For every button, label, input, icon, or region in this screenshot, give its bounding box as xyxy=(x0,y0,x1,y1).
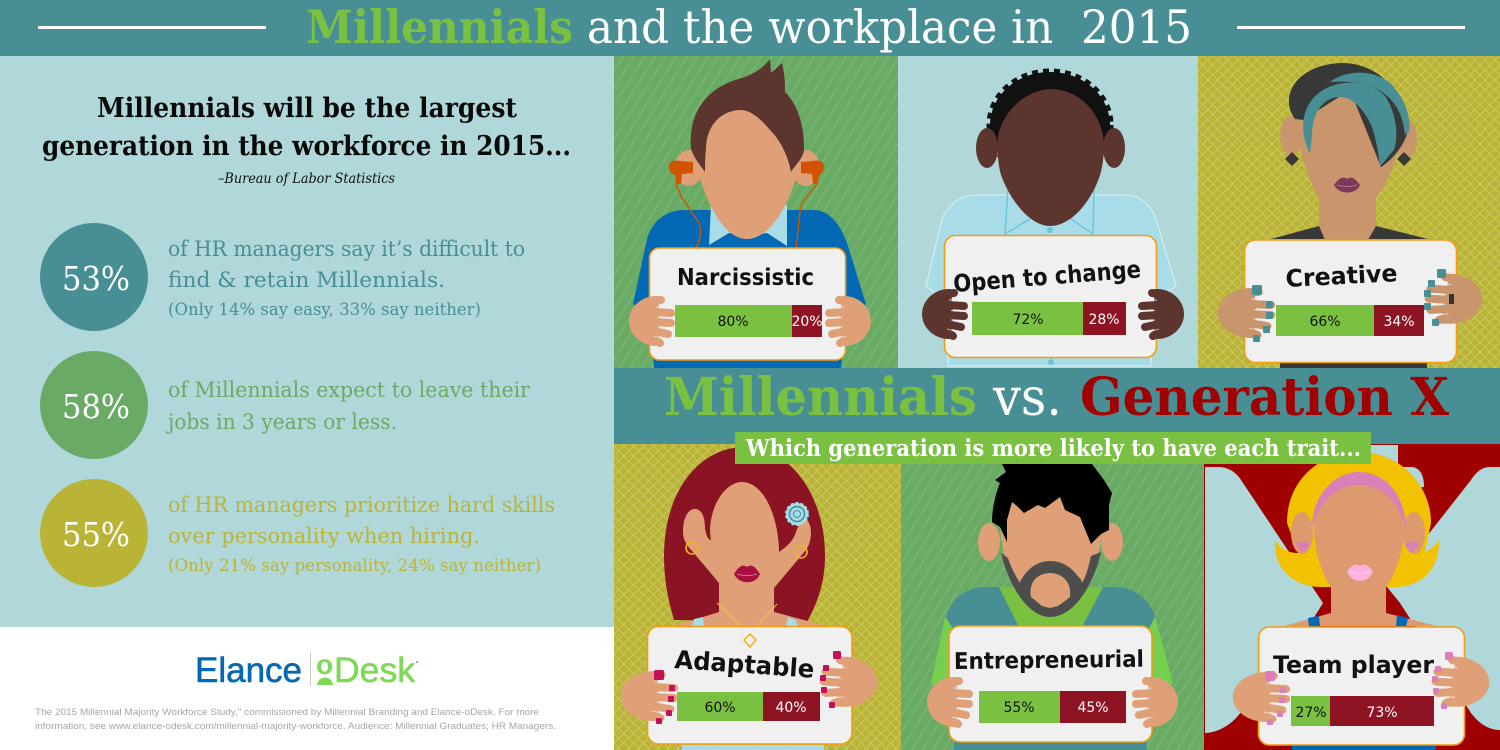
title: and the workplace in 2015 xyxy=(587,0,1192,54)
hands xyxy=(927,677,1178,727)
bar xyxy=(979,691,1126,723)
hair xyxy=(664,447,825,622)
trait label: Entrepreneurial xyxy=(954,647,1144,675)
collar xyxy=(1005,188,1094,234)
stat: 58% xyxy=(40,351,531,459)
shirt xyxy=(633,210,866,368)
header band xyxy=(0,0,1500,56)
bar xyxy=(1276,305,1424,336)
hands xyxy=(1233,654,1493,722)
logo: o xyxy=(316,649,333,680)
trait label: Open to change xyxy=(952,255,1142,298)
shirt xyxy=(931,617,1173,750)
hair xyxy=(992,464,1112,544)
sign xyxy=(944,236,1156,358)
pendant xyxy=(744,634,756,647)
stat: 55% xyxy=(40,479,555,587)
panel: Narcissistic xyxy=(614,56,898,368)
title xyxy=(306,0,1192,54)
title: Millennials xyxy=(306,0,573,54)
source credit: –Bureau of Labor Statistics xyxy=(218,171,395,187)
source note xyxy=(35,707,556,732)
neck and shoulders xyxy=(1284,585,1437,626)
hands xyxy=(621,654,881,721)
head xyxy=(683,482,811,597)
bar xyxy=(677,692,820,721)
hair xyxy=(1275,452,1439,587)
bar xyxy=(675,305,823,337)
stat: 55%: (Only 21% say personality, 24% say neither) xyxy=(168,556,541,576)
stat: 53%: 53% xyxy=(62,259,130,298)
panel: Creative xyxy=(1198,56,1500,368)
flower xyxy=(786,503,808,525)
stat: 55%: over personality when hiring. xyxy=(168,524,480,548)
shoulders xyxy=(1271,226,1428,368)
hands xyxy=(1218,271,1486,338)
bar: 55% xyxy=(1003,700,1035,716)
earrings xyxy=(1297,542,1418,553)
head xyxy=(976,89,1125,226)
heading xyxy=(42,93,571,162)
stat: 53%: of HR managers say it’s difficult to xyxy=(168,237,525,261)
straps xyxy=(1308,615,1408,627)
bar: 72% xyxy=(1012,312,1044,328)
shirt xyxy=(926,195,1176,366)
ring xyxy=(1449,294,1454,304)
trait label: Team player xyxy=(1273,651,1434,679)
lips xyxy=(1334,178,1360,192)
shoulders and neck xyxy=(674,583,826,626)
trait label: Creative xyxy=(1285,259,1398,293)
heading: Millennials will be the largest xyxy=(97,93,517,124)
bar: 20% xyxy=(791,314,823,330)
straps xyxy=(692,617,798,627)
sign xyxy=(1258,627,1464,745)
panel: Team player xyxy=(1204,444,1500,750)
trait label: Narcissistic xyxy=(677,265,814,291)
bar: 45% xyxy=(1077,700,1109,716)
bar: 40% xyxy=(775,700,807,716)
stat: 55%: 55% xyxy=(62,515,130,554)
nails xyxy=(1265,652,1453,725)
banner title xyxy=(664,367,1450,428)
bar: 34% xyxy=(1383,314,1415,330)
banner title: vs. xyxy=(992,368,1062,428)
earrings xyxy=(1285,152,1411,166)
heading: generation in the workforce in 2015... xyxy=(42,131,571,162)
lips xyxy=(1347,564,1373,581)
stat: 53%: (Only 14% say easy, 33% say neither) xyxy=(168,300,481,320)
panel: Open to change xyxy=(898,56,1198,368)
stat: 58%: 58% xyxy=(62,387,130,426)
hands xyxy=(922,289,1184,339)
sign xyxy=(1244,240,1456,362)
subtitle: Which generation is more likely to have each trait... xyxy=(745,435,1361,462)
head xyxy=(675,59,820,239)
stat: 58%: jobs in 3 years or less. xyxy=(165,410,397,434)
stat: 53% xyxy=(40,223,525,331)
logo xyxy=(195,649,418,690)
nails xyxy=(1252,269,1446,342)
panel: Entrepreneurial xyxy=(901,444,1204,750)
bar xyxy=(1291,696,1434,726)
bar: 73% xyxy=(1366,705,1398,721)
head xyxy=(1291,485,1425,599)
stat: 53%: find & retain Millennials. xyxy=(168,268,445,292)
background shapes xyxy=(1205,445,1500,733)
earphones xyxy=(669,161,824,248)
hands xyxy=(629,296,871,346)
lips xyxy=(734,566,760,582)
headband xyxy=(1312,472,1406,530)
head xyxy=(978,470,1123,617)
bar: 27% xyxy=(1295,705,1327,721)
panel: Adaptable xyxy=(614,444,901,750)
hair xyxy=(989,71,1111,179)
trait label: Adaptable xyxy=(674,645,815,684)
banner: Millennials vs. Generation X xyxy=(614,367,1500,464)
nails xyxy=(654,651,841,724)
bar: 60% xyxy=(704,700,736,716)
logo: Elance xyxy=(195,651,302,690)
collar xyxy=(709,205,787,246)
bar: 66% xyxy=(1309,314,1341,330)
banner title: Generation X xyxy=(1080,367,1450,428)
necklace xyxy=(717,603,777,635)
sign xyxy=(648,626,852,744)
source note: information, see www.elance-odesk.com/millennial-majority-workforce. Audience: Millennial Graduates; HR Managers. xyxy=(35,721,556,732)
panel: logo and source xyxy=(0,627,614,750)
neck xyxy=(1319,190,1376,240)
logo: Desk xyxy=(334,651,415,690)
goatee xyxy=(1020,570,1082,609)
head xyxy=(1280,63,1417,213)
beard xyxy=(1001,552,1101,617)
bar: 28% xyxy=(1088,312,1120,328)
source note: The 2015 Millennial Majority Workforce Study," commissioned by Millennial Branding and Elance-oDesk. For more xyxy=(35,707,539,718)
stat: 58%: of Millennials expect to leave their xyxy=(168,378,531,402)
stat: 55%: of HR managers prioritize hard skills xyxy=(168,493,555,517)
sign xyxy=(949,626,1152,742)
panel: left statistics xyxy=(0,56,614,627)
bar: 80% xyxy=(717,314,749,330)
collar xyxy=(999,587,1103,627)
sign xyxy=(650,248,846,360)
banner title: Millennials xyxy=(664,367,977,428)
bar xyxy=(972,302,1126,335)
earrings xyxy=(686,542,807,558)
